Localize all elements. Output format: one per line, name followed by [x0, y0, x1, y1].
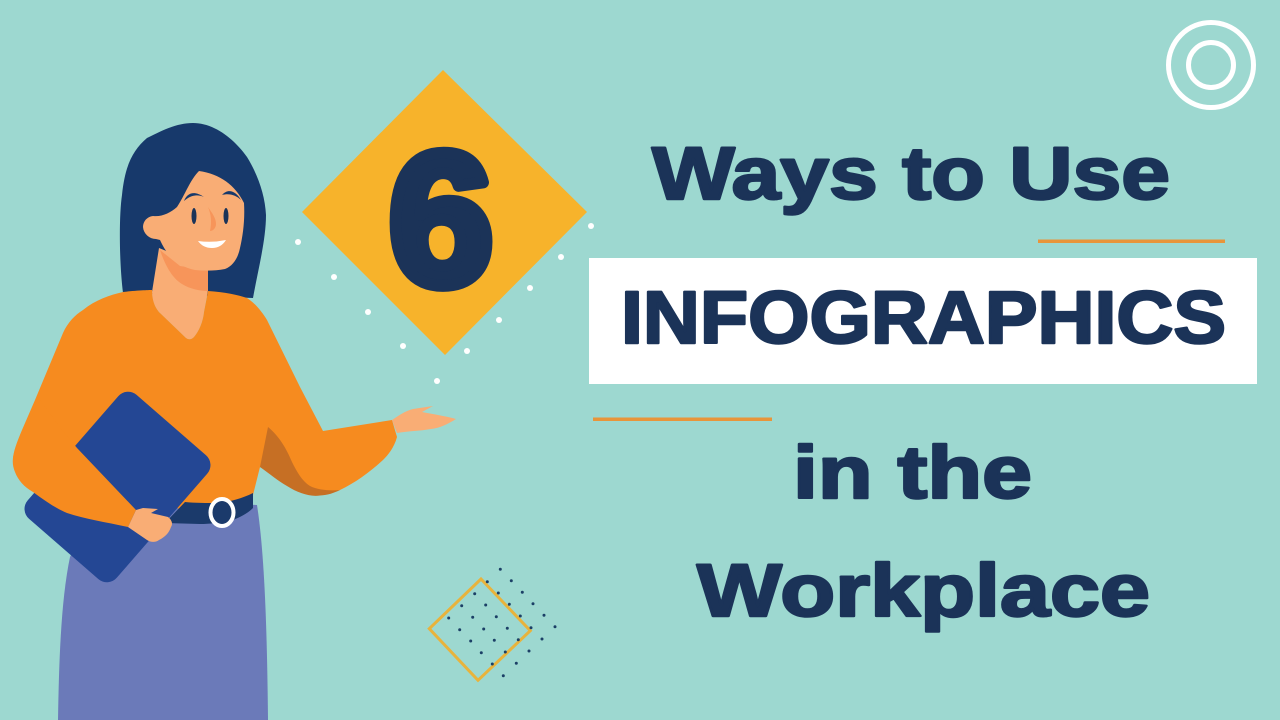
- eyebrows: [184, 191, 241, 201]
- forearm: [13, 400, 136, 527]
- neck: [152, 248, 208, 339]
- heading line: in the: in the: [793, 431, 1032, 514]
- smile: [198, 240, 226, 248]
- nose: [208, 207, 216, 231]
- right hand: [392, 406, 456, 433]
- belt buckle: [210, 499, 234, 526]
- tablet: [19, 386, 216, 588]
- heading line: Ways to Use: Ways to Use: [652, 132, 1170, 215]
- neck shadow: [160, 250, 208, 291]
- face: [143, 171, 244, 271]
- sleeve shadow: [260, 427, 340, 496]
- sweater torso and arm: [13, 290, 397, 510]
- left hand: [128, 508, 172, 542]
- skirt: [58, 500, 268, 720]
- illustration: woman presenting with tablet: [13, 123, 456, 720]
- white banner: INFOGRAPHICS: [589, 258, 1257, 384]
- decorative white dots under the diamond: [295, 223, 594, 384]
- decorative outlined diamond with dot grid: [429, 568, 556, 680]
- icon: concentric circle logo: [1168, 22, 1254, 108]
- accent line bottom: [593, 418, 772, 421]
- white banner: INFOGRAPHICS: INFOGRAPHICS: [621, 276, 1226, 359]
- yellow diamond with number 6: [302, 70, 587, 355]
- yellow diamond with number 6: 6: [389, 114, 493, 324]
- accent line top: [1038, 240, 1225, 243]
- belt: [165, 493, 253, 524]
- hair: [120, 123, 266, 298]
- heading line: Workplace: Workplace: [697, 549, 1150, 632]
- eyes: [192, 208, 228, 224]
